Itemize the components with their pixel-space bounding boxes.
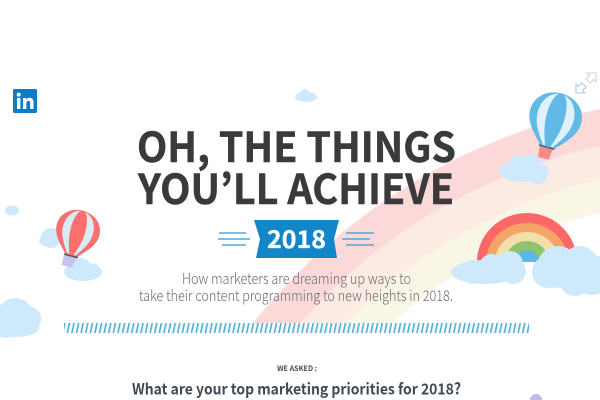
title: OH, THE THINGS — [137, 114, 456, 174]
ribbon lines: right — [342, 233, 374, 245]
icon: resize arrows — [576, 73, 596, 93]
cloud: under blue balloon — [499, 155, 549, 184]
cloud: rainbow left — [451, 251, 526, 284]
hot-air balloon: blue — [519, 87, 587, 165]
large background rainbow — [252, 108, 600, 323]
striped divider — [64, 323, 529, 333]
ribbon lines: left — [218, 233, 250, 245]
cloud: behind left balloon — [39, 228, 61, 248]
cloud: small left — [5, 206, 19, 216]
subtitle: take their content programming to new heights in 2018. — [139, 285, 453, 306]
year ribbon — [254, 220, 339, 258]
title — [137, 114, 456, 216]
title: YOU’LL ACHIEVE — [137, 156, 454, 216]
subtitle — [139, 268, 453, 306]
question heading: What are your top marketing priorities for 2018? — [132, 378, 461, 400]
label: we asked: WE ASKED : — [277, 364, 317, 374]
cloud: top centre — [295, 89, 317, 102]
purple dot — [530, 394, 542, 400]
year ribbon: 2018 — [267, 220, 326, 255]
LinkedIn logo — [13, 89, 37, 113]
cloud: bottom-left large — [0, 298, 41, 338]
small rainbow — [477, 213, 577, 262]
cloud: below left balloon — [64, 258, 102, 281]
hot-air balloon: red — [47, 205, 104, 272]
cloud: rainbow right — [532, 246, 600, 296]
subtitle: How marketers are dreaming up ways to — [182, 268, 411, 289]
